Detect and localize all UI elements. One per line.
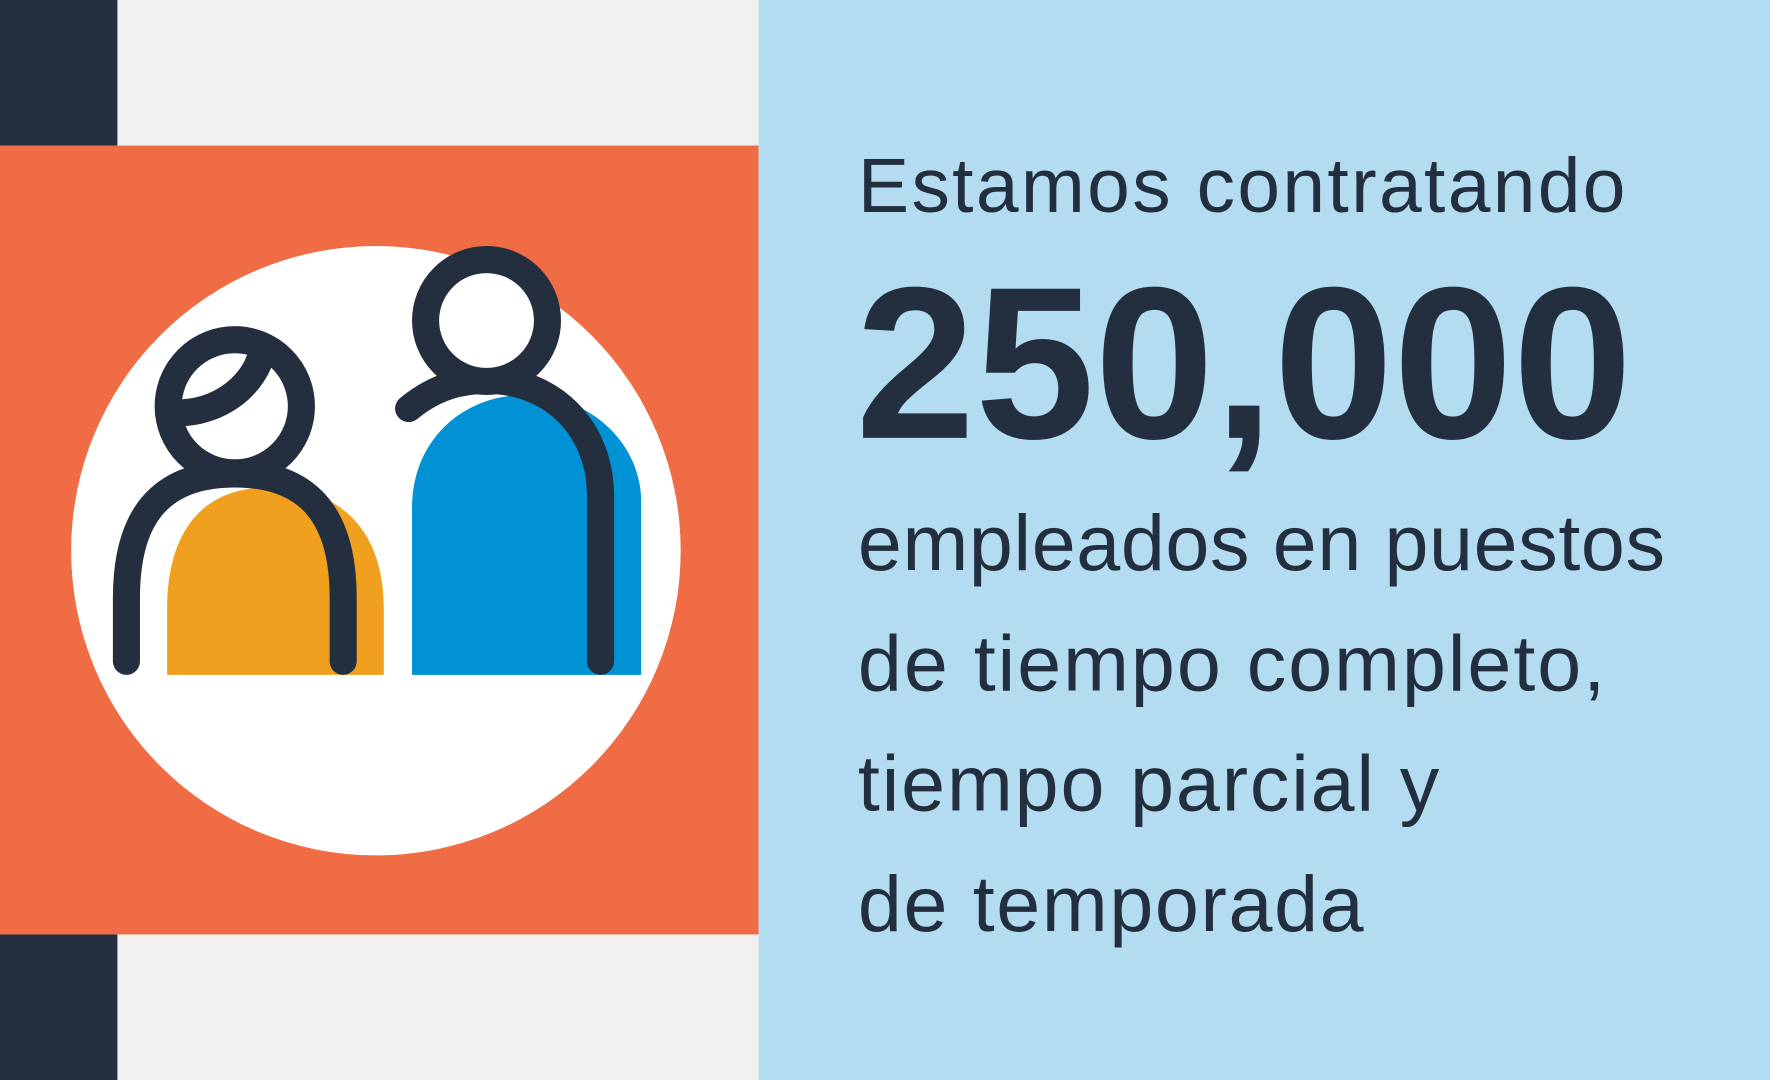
heading: Estamos contratando (858, 144, 1626, 229)
icon: right person (409, 260, 641, 675)
panel: text (759, 0, 1770, 1080)
description: empleados en puestos (858, 498, 1665, 587)
panel: orange illustration (0, 146, 759, 934)
white circle (71, 246, 681, 855)
big number: 250,000 (856, 242, 1632, 484)
dark bar top (0, 0, 117, 146)
icon: left person (126, 340, 384, 675)
description: de tiempo completo, (858, 619, 1605, 708)
background gray (0, 0, 759, 1080)
description: de temporada (858, 859, 1364, 948)
description: tiempo parcial y (858, 738, 1440, 827)
description (858, 498, 1665, 948)
dark bar bottom (0, 934, 117, 1080)
